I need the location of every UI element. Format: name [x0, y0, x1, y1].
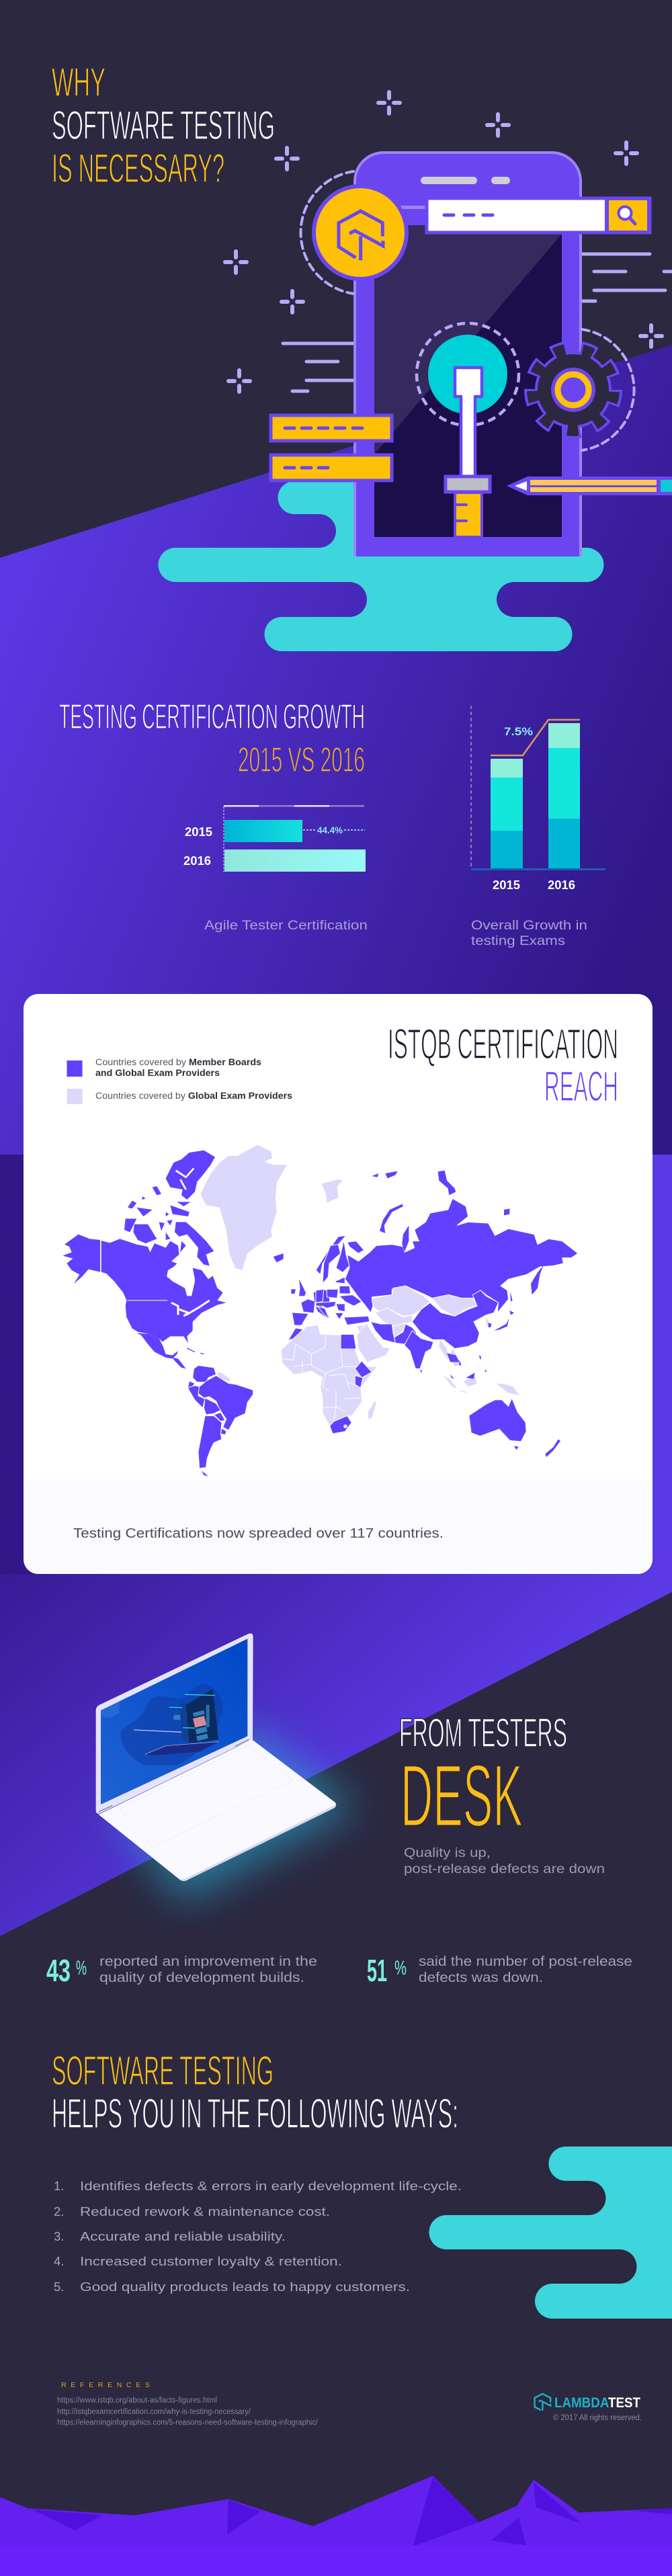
- bar 2015: [224, 820, 302, 842]
- mongolia: [432, 1295, 477, 1316]
- title line: why: WHY: [52, 60, 106, 105]
- ecuador: [187, 1381, 195, 1388]
- value label: 44.4%: [317, 825, 343, 835]
- new guinea: [496, 1383, 519, 1396]
- subheading: 2015 VS 2016: [238, 741, 365, 780]
- caption: overall growth: testing Exams: [471, 934, 565, 948]
- icon: gear: [533, 349, 614, 430]
- description: defects was down.: [419, 1970, 543, 1985]
- mexico: [136, 1333, 178, 1359]
- teal splash right: [429, 2147, 672, 2319]
- iceland: [274, 1253, 284, 1262]
- kazakhstan: [372, 1286, 430, 1316]
- italy: [316, 1306, 329, 1319]
- caribbean: [187, 1348, 204, 1354]
- norway: [316, 1235, 346, 1275]
- stat: 51 percent: [367, 1953, 632, 1988]
- list item 3: Accurate and reliable usability.: [80, 2229, 286, 2243]
- morocco: [289, 1329, 302, 1339]
- icon: lambda hexagon logo: [339, 211, 383, 260]
- legend swatch: global exam providers: [67, 1089, 82, 1104]
- phone body: [353, 151, 582, 556]
- tierra del fuego: [202, 1470, 208, 1477]
- canada and usa: [101, 1239, 226, 1343]
- uk and ireland: [299, 1279, 306, 1296]
- afghanistan: [393, 1323, 405, 1337]
- caption: overall growth: [471, 919, 587, 948]
- speed lines: [283, 254, 672, 391]
- list item 1: 1.: [54, 2179, 64, 2193]
- heading: [59, 698, 365, 780]
- new siberian islands: [504, 1208, 509, 1215]
- mountains: [0, 2476, 672, 2576]
- number: 51: [367, 1953, 387, 1988]
- phone: [353, 151, 582, 556]
- myanmar: [439, 1339, 448, 1360]
- purple band behind map: [0, 1155, 672, 1574]
- belarus: [339, 1286, 351, 1294]
- logo: lambdatest: [535, 2394, 642, 2422]
- heading: TESTING CERTIFICATION GROWTH: [59, 698, 365, 737]
- logo badge: [314, 186, 407, 279]
- thailand: [447, 1353, 459, 1362]
- finland: [336, 1240, 349, 1272]
- map: americas north and west europe: [62, 1145, 329, 1369]
- description: quality of development builds.: [99, 1970, 304, 1985]
- list item 5: 5.: [54, 2280, 64, 2294]
- germany: [314, 1289, 329, 1308]
- section: from testers desk: [96, 1634, 605, 1902]
- phone screen: [374, 225, 562, 537]
- china: [412, 1290, 499, 1349]
- brazil: [198, 1376, 253, 1430]
- description: [419, 1954, 632, 1985]
- subheading: [404, 1846, 605, 1876]
- panel: istqb certification reach: [24, 994, 653, 1574]
- arctic islands: [124, 1151, 215, 1265]
- legend swatch: member boards: [67, 1061, 82, 1077]
- laptop base: [99, 1739, 336, 1881]
- map: south america and africa: [187, 1325, 378, 1477]
- novaya zemlya: [380, 1204, 403, 1233]
- speaker bars: [421, 177, 477, 184]
- keyboard: [120, 1745, 294, 1847]
- alaska: [62, 1235, 100, 1284]
- title line: is necessary: IS NECESSARY?: [52, 146, 224, 191]
- madagascar: [368, 1401, 376, 1419]
- section heading: software testing helps: SOFTWARE TESTING: [52, 2048, 274, 2093]
- list item 2: 2.: [54, 2204, 64, 2218]
- wordmark: LAMBDATEST: [554, 2395, 640, 2411]
- bar 2016: [224, 849, 366, 872]
- arabia: [358, 1324, 390, 1362]
- india: [405, 1331, 433, 1369]
- growth value: 7.5%: [504, 725, 533, 738]
- turkey: [344, 1316, 370, 1325]
- label 2016: 2016: [183, 854, 211, 868]
- africa: [281, 1325, 378, 1426]
- card heading: [388, 1021, 618, 1110]
- reference links: https://www.istqb.org/about-as/facts-figures.html: [57, 2397, 217, 2405]
- balkans and central europe: [316, 1302, 336, 1308]
- yamal: [402, 1225, 409, 1252]
- severnaya zemlya: [438, 1171, 456, 1195]
- sri lanka: [420, 1370, 422, 1373]
- korea: [485, 1317, 491, 1325]
- references: REFERENCES: [61, 2381, 150, 2389]
- kola: [347, 1241, 364, 1253]
- legend text: global exam providers: Countries covered by Global Exam Providers: [95, 1091, 292, 1101]
- list item 5: Good quality products leads to happy customers.: [80, 2280, 410, 2294]
- list item 4: 4.: [54, 2254, 64, 2268]
- uruguay: [220, 1428, 226, 1435]
- laptop lid: [96, 1634, 253, 1814]
- kenya: [355, 1376, 363, 1388]
- mountain footer: [0, 2476, 672, 2576]
- chile and argentina: [198, 1416, 222, 1468]
- right gear dashed ring: [582, 329, 634, 450]
- lesotho: [344, 1425, 347, 1428]
- svalbard: [321, 1179, 343, 1203]
- stacked bar chart: overall growth: [471, 706, 605, 892]
- colombia venezuela: [193, 1366, 216, 1382]
- ground band: [0, 2545, 672, 2576]
- tablet graphic: [134, 1689, 218, 1755]
- reference links: https://elearninginfographics.com/5-reasons-need-software-testing-infographic/: [57, 2419, 319, 2427]
- south africa: [330, 1416, 351, 1434]
- label 2015: 2015: [185, 825, 212, 839]
- sakhalin: [531, 1265, 543, 1295]
- laptop illustration: [96, 1634, 336, 1881]
- ukraine: [339, 1295, 362, 1306]
- dashed ring around logo badge: [301, 171, 353, 294]
- purple diagonal band: from testers desk: [0, 1574, 672, 1936]
- pakistan: [394, 1324, 417, 1344]
- border line usa canada: [127, 1299, 167, 1301]
- copyright: © 2017 All rights reserved.: [553, 2414, 642, 2422]
- percent sign: %: [76, 1957, 87, 1979]
- legend text: member boards: Countries covered by Member Boards: [95, 1057, 261, 1067]
- yellow form fields: [271, 415, 392, 481]
- teal magnifying key: [417, 323, 519, 537]
- tunisia: [317, 1325, 321, 1334]
- card footer text: Testing Certifications now spreaded over 117 countries.: [73, 1526, 444, 1541]
- references: [57, 2381, 319, 2427]
- icon: magnifier: [618, 207, 635, 224]
- screen blobs: [121, 1684, 223, 1765]
- stacked bar 2016: [548, 723, 580, 868]
- laptop glow: [114, 1727, 356, 1902]
- list item 2: Reduced rework & maintenance cost.: [80, 2204, 330, 2218]
- australia: [469, 1399, 526, 1441]
- greenland: [200, 1145, 287, 1270]
- hinge: [99, 1739, 249, 1812]
- sweden: [323, 1245, 341, 1284]
- number: 43: [46, 1953, 71, 1988]
- heading: desk: DESK: [401, 1746, 523, 1845]
- caption: overall growth: Overall Growth in: [471, 919, 587, 933]
- malaysia and philippines: [459, 1360, 462, 1366]
- baltics: [335, 1277, 345, 1284]
- indonesia: [444, 1376, 458, 1389]
- axis label 2015: 2015: [493, 878, 520, 892]
- percent sign: %: [394, 1957, 407, 1979]
- stacked bar 2015: [491, 759, 523, 868]
- france: [301, 1299, 314, 1313]
- growth line: [491, 720, 580, 755]
- tasmania: [514, 1446, 519, 1450]
- bolivia: [204, 1398, 220, 1415]
- sarawak: [466, 1373, 475, 1379]
- caption: agile tester certification: Agile Tester Certification: [204, 919, 368, 933]
- germany east: [316, 1289, 324, 1302]
- teal splash: [159, 481, 603, 651]
- axis label 2016: 2016: [548, 878, 575, 892]
- russia: [345, 1198, 578, 1313]
- laptop screen: [101, 1638, 247, 1804]
- japan: [494, 1319, 509, 1331]
- section heading: software testing helps: [52, 2048, 458, 2137]
- subheading: Quality is up,: [404, 1846, 491, 1860]
- search placeholder dashes: [444, 214, 493, 216]
- central asia: [375, 1308, 412, 1326]
- description: reported an improvement in the: [99, 1954, 317, 1969]
- african borders: [281, 1335, 362, 1421]
- hudson bay: [167, 1263, 195, 1296]
- subheading: post-release defects are down: [404, 1862, 605, 1876]
- list item 3: 3.: [54, 2229, 64, 2243]
- stat: 43 percent: [46, 1953, 317, 1988]
- icon: lambda logo: [535, 2394, 550, 2411]
- peru: [187, 1386, 205, 1408]
- spain: [292, 1313, 308, 1325]
- paraguay: [214, 1413, 225, 1421]
- bar chart: agile tester certification: [183, 805, 366, 872]
- ethiopia: [355, 1361, 372, 1378]
- title: [52, 60, 275, 191]
- franz josef land: [372, 1173, 378, 1177]
- icon: pencil: [507, 476, 672, 495]
- guianas: [216, 1372, 230, 1382]
- vietnam laos: [450, 1349, 462, 1366]
- icon: sparkles: [225, 92, 662, 392]
- description: [99, 1954, 317, 1985]
- poland: [327, 1289, 338, 1298]
- numbered list of benefits: [54, 2179, 462, 2294]
- great lakes: [171, 1300, 210, 1316]
- world map: [62, 1145, 578, 1477]
- central america: [173, 1358, 186, 1369]
- title line: software testing: SOFTWARE TESTING: [52, 103, 275, 148]
- legend text: member boards second line: and Global Exam Providers: [95, 1068, 220, 1078]
- list item 1: Identifies defects & errors in early development life-cycle.: [80, 2179, 462, 2193]
- iran: [371, 1322, 395, 1343]
- egypt: [341, 1335, 355, 1349]
- reference links: http://istqbexamcertification.com/why-is-testing-necessary/: [57, 2408, 251, 2416]
- card: [24, 994, 653, 1574]
- legend: [67, 1057, 292, 1104]
- description: said the number of post-release: [419, 1954, 632, 1969]
- new zealand: [545, 1440, 560, 1457]
- section: testing certification growth: [59, 698, 605, 948]
- hero illustration: phone with tools: [159, 92, 672, 651]
- map: eurasia and oceania: [316, 1171, 578, 1457]
- search bar: [427, 198, 650, 233]
- mountain shadows: [32, 2477, 672, 2546]
- list item 4: Increased customer loyalty & retention.: [80, 2254, 342, 2268]
- reference links: [57, 2397, 319, 2427]
- purple diagonal band: hero and certification growth: [0, 345, 672, 1155]
